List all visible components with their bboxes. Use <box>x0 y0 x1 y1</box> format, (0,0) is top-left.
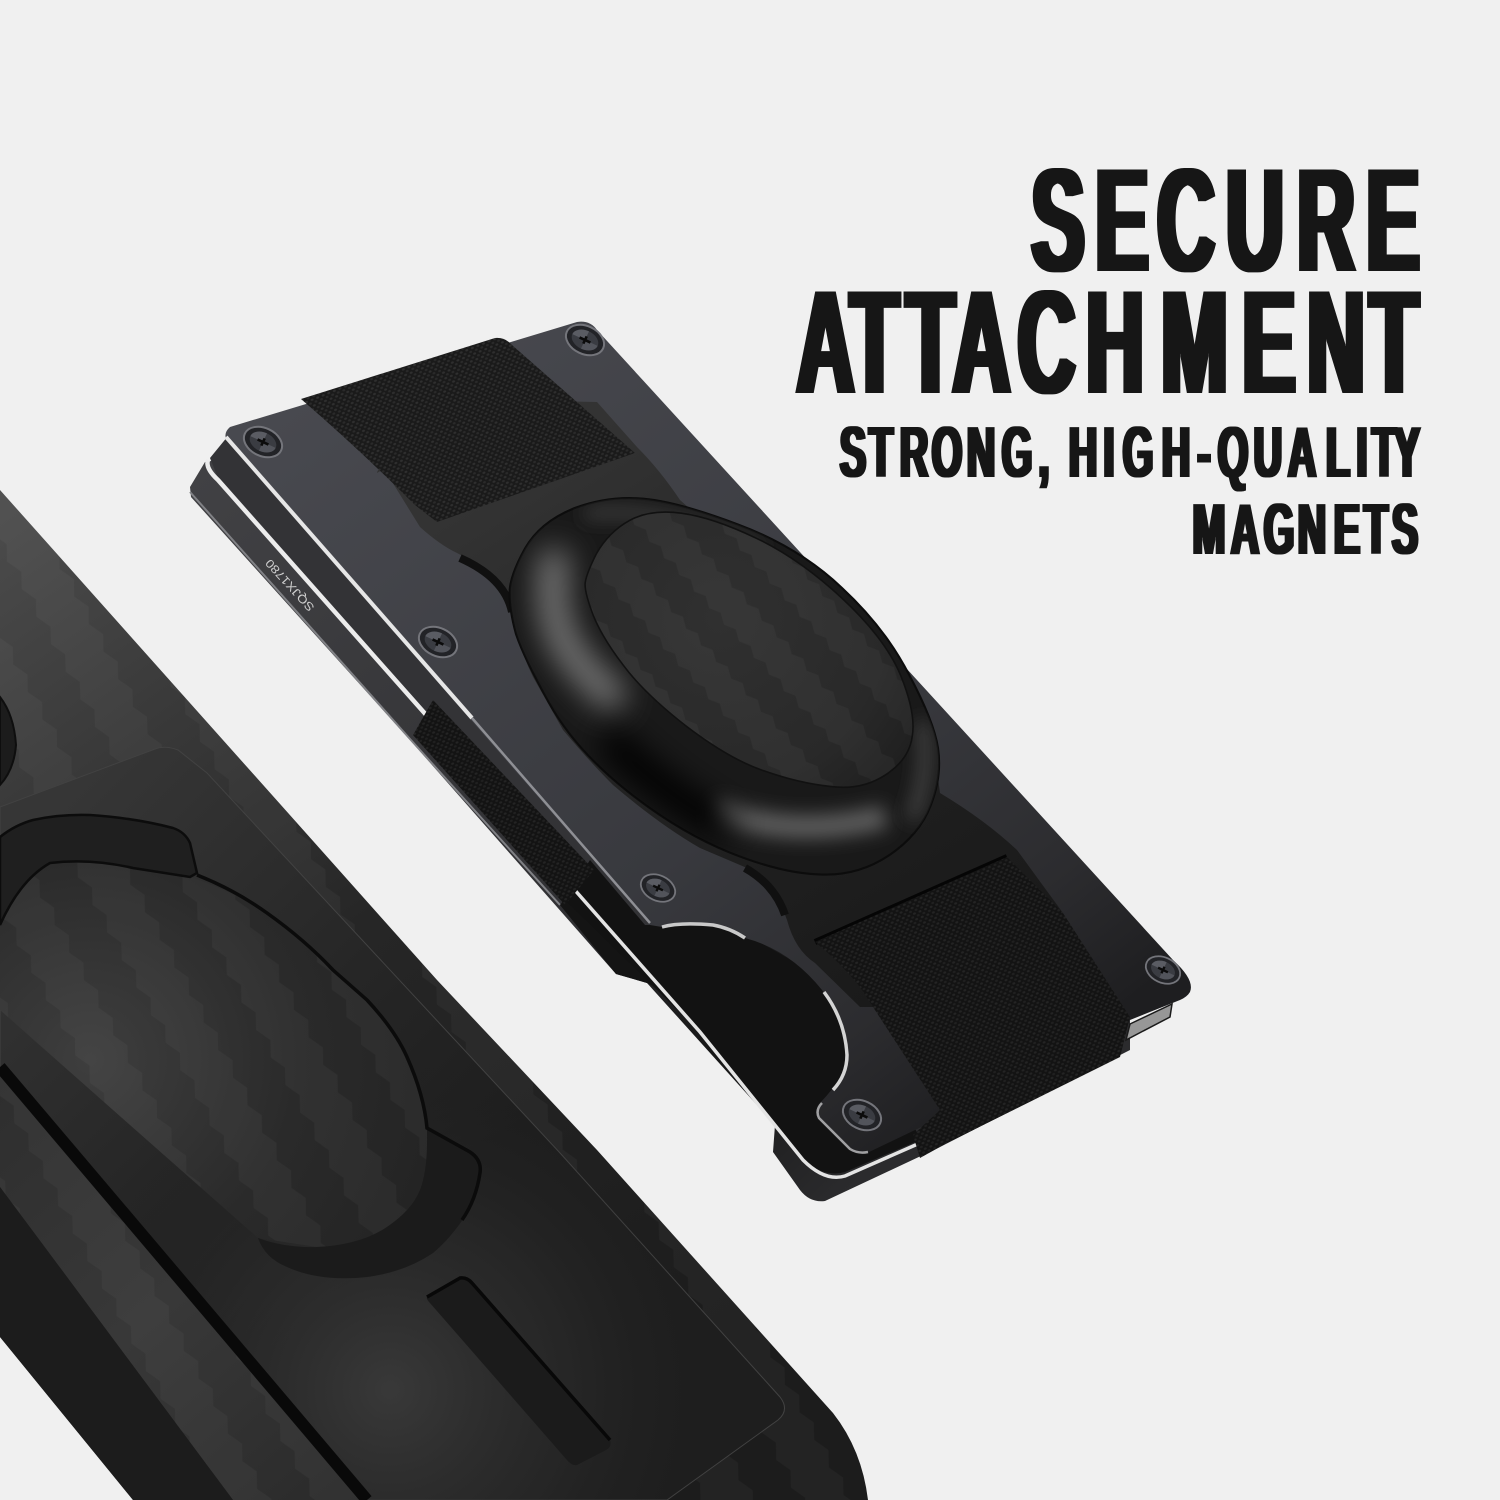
thumb cut-out lower highlight <box>824 992 847 1090</box>
engraved serial number: SQJX1780 <box>264 556 317 613</box>
magnetic mount <box>510 498 939 875</box>
lower crescent cut-out <box>258 1130 480 1278</box>
elastic seen under bracket, lower <box>745 868 785 915</box>
chamfer continuation <box>472 718 650 923</box>
title <box>797 139 1420 425</box>
heading block <box>797 139 1420 570</box>
screw: mid edge lower <box>636 869 680 907</box>
card stack interior <box>565 860 920 1174</box>
screw: far corner top <box>561 319 609 361</box>
plate soft sheen <box>0 747 785 1500</box>
screw: mid edge upper <box>414 621 462 663</box>
card slot <box>427 1278 610 1465</box>
title line 2: ATTACHMENT <box>797 261 1418 425</box>
recess groove outline <box>197 875 480 1220</box>
subtitle <box>840 412 1420 570</box>
bottom elastic strap <box>815 857 1130 1158</box>
top elastic strap <box>301 338 635 522</box>
inlay carbon weave <box>585 512 913 787</box>
black bracket <box>377 400 1063 1007</box>
screw: right corner <box>1141 951 1185 989</box>
dark tab below velcro <box>560 888 665 992</box>
bottom strap shadow <box>815 857 1007 942</box>
thumb cut-out upper highlight <box>662 924 745 938</box>
case body: carbon fibre shell <box>0 490 868 1500</box>
back plate silhouette <box>190 400 1130 1201</box>
bottom highlight <box>714 809 885 827</box>
magnetic mount plate <box>0 747 785 1500</box>
recess carbon weave <box>0 861 427 1247</box>
card slot inner wall <box>427 1278 610 1440</box>
left highlight <box>552 550 621 701</box>
middle plate band <box>210 436 650 925</box>
lower silver card edge <box>573 888 920 1177</box>
mount shading <box>552 512 925 830</box>
upper silver card edge <box>207 460 428 717</box>
subtitle line 2: MAGNETS <box>1193 489 1418 570</box>
side velcro strap <box>413 700 594 905</box>
plate circular carbon recess <box>0 861 427 1247</box>
upper crescent cut-out <box>0 815 197 925</box>
mount body <box>510 498 939 875</box>
groove <box>0 1067 367 1500</box>
subtitle line 1: STRONG, HIGH-QUALITY <box>840 412 1420 493</box>
silver strip at far corner <box>1126 1004 1172 1040</box>
top plate silver chamfer <box>226 437 472 718</box>
case carbon weave <box>0 490 868 1500</box>
camera ring at left edge <box>0 697 16 785</box>
screw: bottom corner <box>838 1094 886 1136</box>
mount carbon inlay <box>585 512 913 787</box>
elastic seen under bracket, upper <box>460 558 512 612</box>
lower-left shadow <box>606 737 730 830</box>
corner highlight <box>818 1103 868 1153</box>
right rim highlight <box>911 721 925 820</box>
top rim highlight <box>585 512 761 550</box>
screw: near corner left <box>239 421 287 463</box>
shadowed lower edge <box>0 1187 233 1500</box>
back plate light edge <box>190 492 560 905</box>
top plate <box>225 322 1191 1154</box>
strip carbon weave <box>0 1067 367 1500</box>
card wallet <box>190 319 1191 1201</box>
title line 1: SECURE <box>1031 139 1420 303</box>
phone case <box>0 490 868 1500</box>
lower carbon strip <box>0 1067 367 1500</box>
